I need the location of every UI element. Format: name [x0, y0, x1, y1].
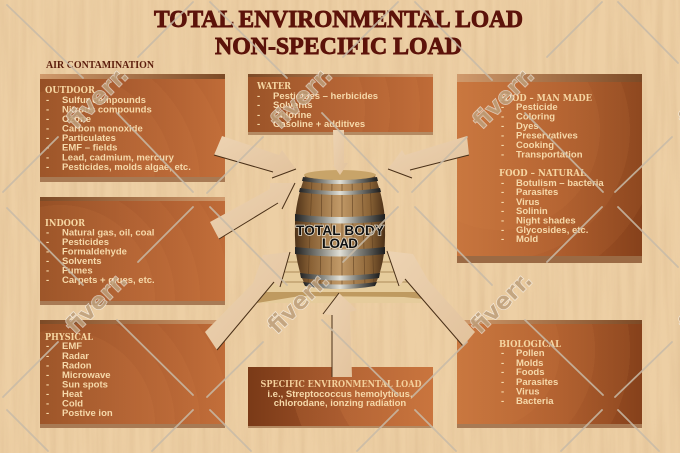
text: food man made list: -: [501, 112, 504, 122]
panel: food: [457, 74, 642, 263]
text: outdoor list: -: [46, 133, 49, 144]
watermark: fiverr marks: fiverr.: [263, 267, 335, 339]
watermark: fiverr marks: [61, 62, 680, 339]
text: water list: -: [257, 91, 260, 102]
text: biological list: [499, 339, 561, 407]
text: food natural list: Glycosides, etc.: [516, 225, 588, 236]
text: specific load description: i.e., Streptococcus hemolyticus,: [267, 389, 413, 400]
text: biological list: BIOLOGICAL: [499, 339, 561, 350]
text: physical list: [45, 332, 113, 419]
text: food man made list: [499, 93, 592, 160]
arrow: specific load to barrel: [323, 293, 357, 377]
text: food natural list: -: [501, 197, 504, 208]
text: food natural list: Night shades: [516, 216, 576, 226]
text: water list: [256, 81, 378, 130]
text: physical list: -: [46, 341, 49, 352]
text: indoor list: [45, 218, 155, 286]
text: food man made list: FOOD – MAN MADE: [499, 93, 592, 104]
text: water list: Solvents: [273, 100, 313, 111]
text: outdoor list: -: [46, 152, 49, 164]
barrel hoops: [295, 177, 385, 289]
arrow: indoor to barrel: [210, 183, 295, 239]
text: outdoor list: Carbon monoxide: [62, 124, 143, 134]
text: biological list: Molds: [516, 358, 543, 369]
text: physical list: Heat: [62, 389, 83, 400]
text: biological list: -: [501, 396, 504, 407]
text: water list: WATER: [256, 81, 291, 92]
text: indoor list: Fumes: [62, 266, 93, 276]
text: water list: Gasoline + additives: [273, 119, 365, 130]
text: food natural list: Solinin: [516, 206, 548, 217]
text: outdoor list: -: [46, 114, 49, 125]
panel: physical: [40, 320, 225, 428]
panel: indoor: [40, 197, 225, 305]
arrow: physical to barrel: [205, 252, 290, 350]
barrel staves: [308, 178, 374, 289]
text: outdoor list: -: [46, 162, 49, 173]
text: biological list: -: [501, 367, 504, 378]
text: indoor list: Formaldehyde: [62, 246, 127, 258]
text: indoor list: Pesticides: [62, 237, 109, 248]
text: outdoor list: -: [46, 95, 49, 106]
text: biological list: -: [501, 386, 504, 398]
text: food man made list: -: [501, 140, 504, 151]
text: food natural list: Virus: [516, 197, 540, 208]
text: food natural list: [499, 168, 604, 245]
text: food natural list: -: [501, 206, 504, 217]
arrow: food to barrel: [388, 136, 469, 178]
text: physical list: Microwave: [62, 370, 111, 381]
watermark: fiverr marks: fiverr.: [266, 62, 338, 134]
text: biological list: Foods: [516, 367, 544, 378]
watermark: fiverr marks: fiverr.: [62, 62, 134, 134]
text: indoor list: -: [46, 246, 49, 258]
text: food man made list: -: [501, 150, 504, 160]
barrel label: [296, 223, 384, 251]
text: physical list: -: [46, 398, 49, 410]
text: biological list: Virus: [516, 386, 540, 398]
title: NON-SPECIFIC LOAD: [215, 34, 462, 60]
text: physical list: Cold: [62, 398, 83, 410]
arrow: outdoor to barrel: [214, 136, 296, 178]
text: indoor list: INDOOR: [45, 218, 85, 229]
text: specific load description: [260, 379, 422, 409]
text: food man made list: Pesticide: [516, 102, 558, 113]
text: biological list: -: [501, 377, 504, 388]
text: food man made list: -: [501, 102, 504, 113]
text: indoor list: -: [46, 237, 49, 248]
text: food natural list: Mold: [516, 234, 538, 245]
text: outdoor list: [45, 85, 191, 173]
barrel label: LOAD: [322, 236, 358, 251]
text: food natural list: -: [501, 178, 504, 189]
text: biological list: Bacteria: [516, 396, 554, 407]
text: outdoor list: Sulfur compounds: [62, 95, 146, 106]
text: food natural list: -: [501, 187, 504, 198]
text: outdoor list: Pesticides, molds algae, etc.: [62, 162, 191, 173]
text: outdoor list: OUTDOOR: [45, 85, 95, 96]
text: outdoor list: Ozone: [62, 114, 91, 125]
text: indoor list: -: [46, 275, 49, 286]
text: outdoor list: Particulates: [62, 133, 116, 144]
text: physical list: Sun spots: [62, 380, 108, 390]
text: indoor list: -: [46, 228, 49, 238]
text: biological list: -: [501, 358, 504, 369]
watermark: fiverr marks: fiverr.: [61, 267, 133, 339]
watermark: fiverr marks: fiverr.: [466, 267, 538, 339]
text: outdoor list: Nitrous compounds: [62, 104, 152, 116]
text: outdoor list: EMF – fields: [62, 142, 117, 154]
text: water list: -: [257, 100, 260, 111]
text: food man made list: Coloring: [516, 112, 555, 122]
text: outdoor list: -: [46, 124, 49, 134]
title: [154, 7, 523, 60]
arrow: biological to barrel: [387, 251, 475, 346]
text: physical list: -: [46, 380, 49, 390]
panel: biological: [457, 320, 642, 428]
text: indoor list: -: [46, 266, 49, 276]
text: water list: -: [257, 119, 260, 130]
text: food natural list: -: [501, 216, 504, 226]
text: indoor list: Carpets + glues, etc.: [62, 275, 155, 286]
barrel label: TOTAL BODY: [296, 223, 384, 238]
text: water list: -: [257, 110, 260, 121]
text: outdoor list: Lead, cadmium, mercury: [62, 152, 175, 164]
text: food natural list: FOOD – NATURAL: [499, 168, 586, 179]
text: food natural list: Botulism – bacteria: [516, 178, 604, 189]
text: water list: Chlorine: [273, 110, 312, 121]
text: food natural list: -: [501, 225, 504, 236]
text: specific load description: SPECIFIC ENVIRONMENTAL LOAD: [260, 379, 422, 390]
text: food man made list: Cooking: [516, 140, 554, 151]
text: food man made list: -: [501, 130, 504, 142]
text: food man made list: Transportation: [516, 150, 583, 160]
text: outdoor list: -: [46, 104, 49, 116]
text: physical list: -: [46, 408, 49, 419]
heading: air contamination: AIR CONTAMINATION: [46, 60, 155, 71]
title: TOTAL ENVIRONMENTAL LOAD: [154, 7, 523, 33]
arrow: water to barrel: [333, 130, 348, 175]
panel: outdoor: [40, 74, 225, 182]
text: food man made list: Dyes: [516, 121, 539, 132]
text: biological list: Pollen: [516, 348, 545, 359]
watermark: fiverr marks: fiverr.: [468, 62, 540, 134]
text: biological list: -: [501, 348, 504, 359]
text: physical list: -: [46, 360, 49, 372]
text: physical list: Radon: [62, 360, 92, 372]
text: biological list: Parasites: [516, 377, 558, 388]
text: indoor list: Solvents: [62, 256, 102, 267]
text: outdoor list: -: [46, 142, 49, 154]
text: physical list: Radar: [62, 351, 89, 362]
text: physical list: -: [46, 389, 49, 400]
text: food man made list: -: [501, 121, 504, 132]
shelf: [257, 255, 423, 303]
text: indoor list: -: [46, 256, 49, 267]
text: food natural list: Parasites: [516, 187, 558, 198]
barrel top: [304, 170, 376, 180]
text: food man made list: Preservatives: [516, 130, 578, 142]
text: physical list: Postive ion: [62, 408, 113, 419]
barrel: [295, 170, 385, 289]
text: physical list: -: [46, 351, 49, 362]
panel: water: [248, 74, 433, 135]
text: food natural list: -: [501, 234, 504, 245]
text: water list: Pesticides – herbicides: [273, 91, 378, 102]
text: physical list: PHYSICAL: [45, 332, 93, 343]
text: indoor list: Natural gas, oil, coal: [62, 228, 154, 238]
panel: specific environmental load: [248, 367, 433, 428]
text: physical list: -: [46, 370, 49, 381]
text: specific load description: chlorodane, ionzing radiation: [274, 398, 406, 409]
text: physical list: EMF: [62, 341, 82, 352]
